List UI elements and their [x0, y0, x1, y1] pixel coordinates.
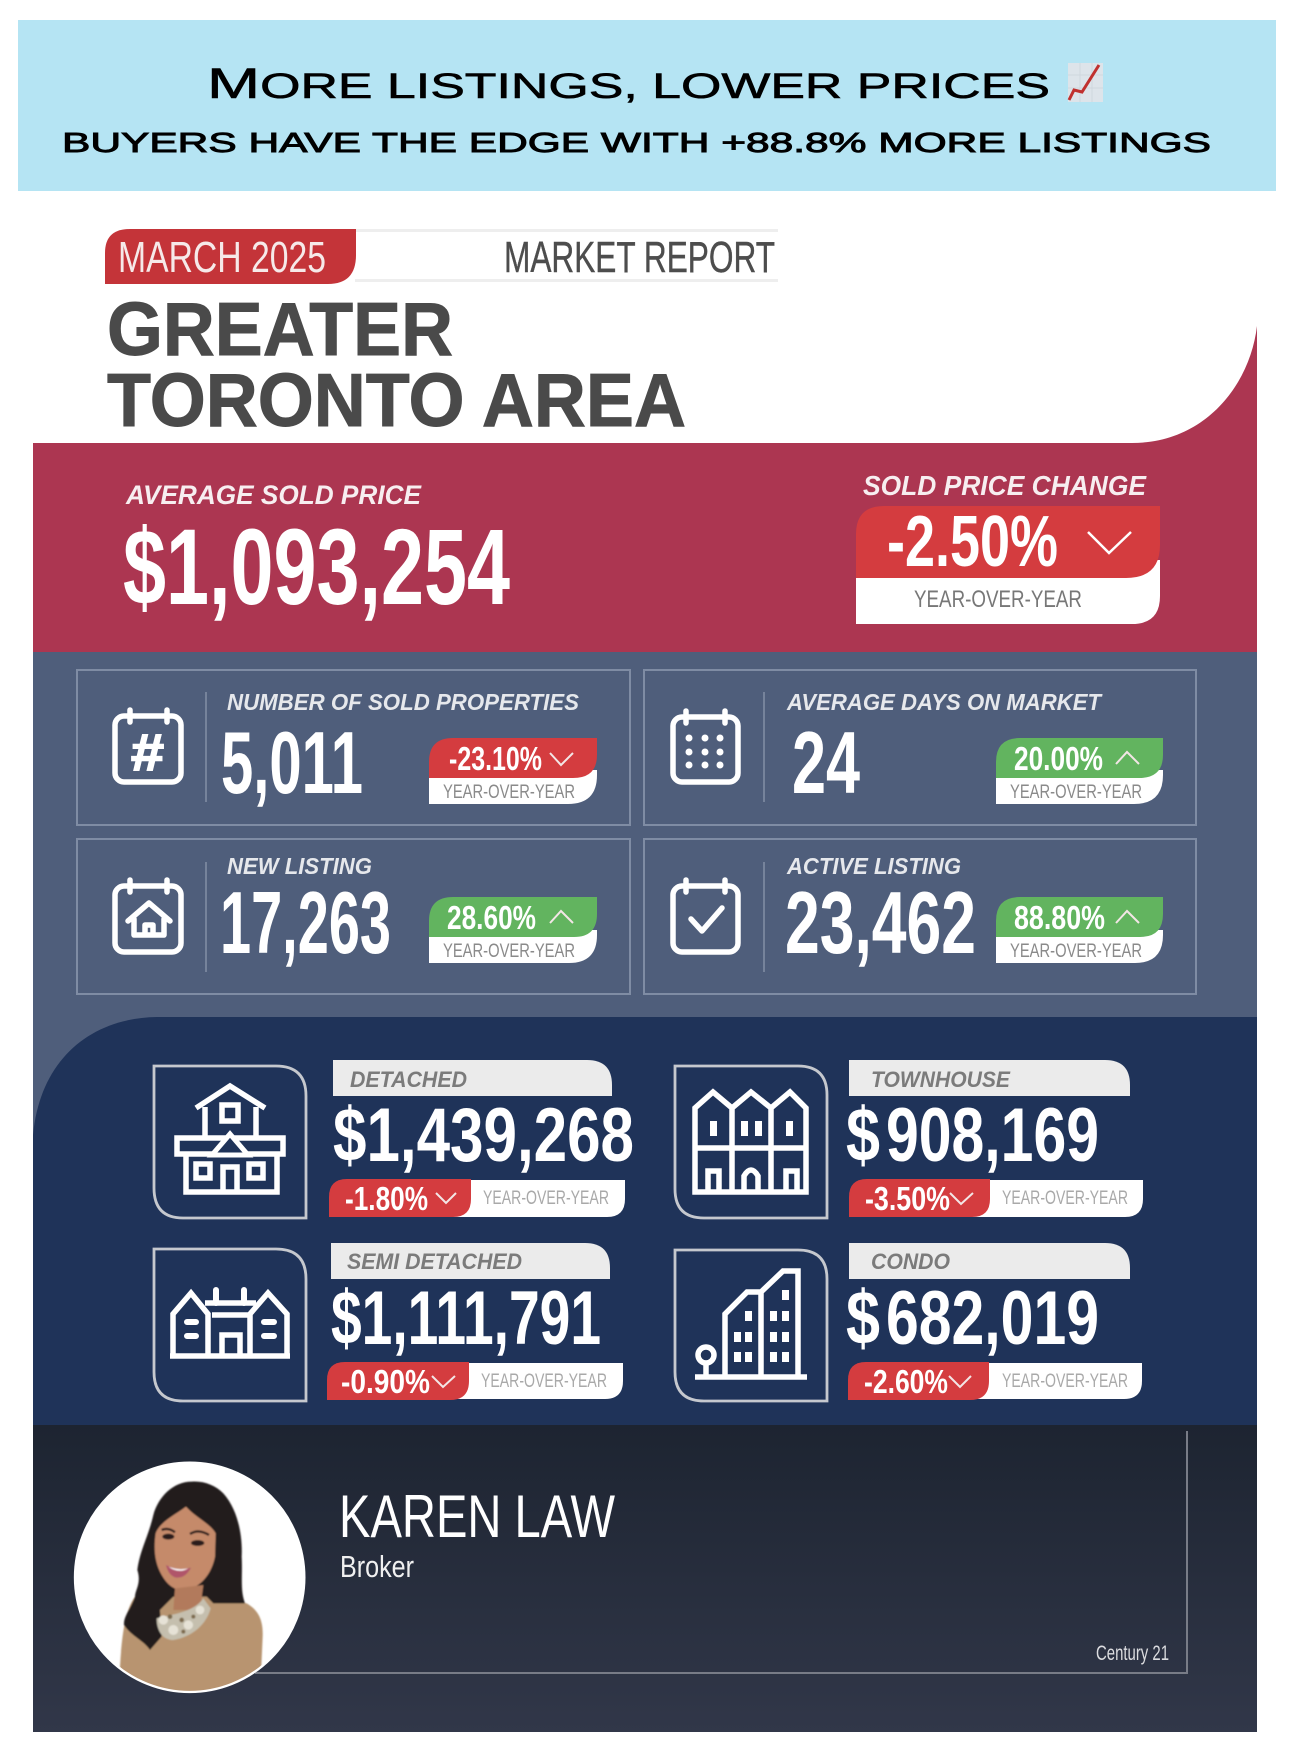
- sold price change badge: -2.50%: [887, 502, 1058, 582]
- price: $1,111,791: [331, 1276, 601, 1361]
- sold price change badge: YEAR-OVER-YEAR: [914, 586, 1082, 613]
- brokerage: Century 21: [1096, 1642, 1169, 1665]
- icon: calendar home: [115, 880, 181, 952]
- change badge: YEAR-OVER-YEAR: [1010, 941, 1142, 962]
- block: semi detached: [154, 1243, 623, 1401]
- label: [331, 1243, 610, 1279]
- banner subtitle: BUYERS HAVE THE EDGE WITH +88.8% MORE LISTINGS: [62, 127, 1211, 158]
- region title: [107, 287, 686, 442]
- region title: TORONTO AREA: [107, 358, 686, 442]
- label: [849, 1060, 1130, 1096]
- change badge: [429, 738, 597, 804]
- change badge: [327, 1362, 623, 1400]
- change badge: YEAR-OVER-YEAR: [1010, 782, 1142, 803]
- icon: townhouse: [675, 1066, 827, 1218]
- report header: MARCH 2025: [118, 233, 326, 282]
- block: detached: [154, 1060, 634, 1218]
- change badge: -2.60%: [864, 1363, 948, 1400]
- market report label: MARKET REPORT: [504, 233, 775, 282]
- change badge: -3.50%: [865, 1180, 950, 1217]
- card: new listing: 17,263: [220, 873, 391, 972]
- sold price change badge: [856, 502, 1160, 624]
- change badge: [996, 897, 1163, 963]
- change badge: 88.80%: [1014, 899, 1105, 936]
- change badge: YEAR-OVER-YEAR: [1002, 1188, 1128, 1209]
- change badge: -23.10%: [449, 740, 542, 777]
- panel: agent footer: [33, 1425, 1257, 1732]
- block: townhouse: [675, 1060, 1143, 1218]
- block: semi detached: SEMI DETACHED: [347, 1249, 522, 1274]
- card: average days on market: [644, 670, 1196, 825]
- change badge: [996, 738, 1163, 804]
- icon: calendar hash: [115, 710, 181, 782]
- price: $: [846, 1276, 880, 1361]
- price: [846, 1276, 1099, 1361]
- label: [849, 1243, 1130, 1279]
- icon: chart emoji: [1068, 63, 1103, 102]
- block: townhouse: TOWNHOUSE: [871, 1067, 1011, 1092]
- agent name: KAREN LAW: [339, 1483, 615, 1550]
- card: average days on market: AVERAGE DAYS ON MARKET: [786, 689, 1103, 715]
- change badge: -0.90%: [341, 1363, 430, 1400]
- change badge: YEAR-OVER-YEAR: [443, 941, 575, 962]
- change badge: 20.00%: [1014, 740, 1103, 777]
- change badge: [849, 1179, 1143, 1217]
- banner title: M ORE LISTINGS, LOWER PRICES: [207, 60, 1050, 108]
- change badge: 28.60%: [447, 899, 536, 936]
- card: number of sold properties: [77, 670, 630, 825]
- change badge: YEAR-OVER-YEAR: [1002, 1371, 1128, 1392]
- average sold price label: AVERAGE SOLD PRICE: [125, 480, 422, 510]
- price: 908,169: [886, 1093, 1099, 1178]
- change badge: [848, 1362, 1142, 1400]
- price: 682,019: [886, 1276, 1099, 1361]
- sold price change label: SOLD PRICE CHANGE: [863, 470, 1147, 501]
- icon: calendar hash: #: [131, 724, 164, 782]
- card: new listing: [77, 839, 630, 994]
- card: new listing: NEW LISTING: [227, 853, 372, 879]
- icon: detached house: [154, 1066, 306, 1218]
- panel: property types: [33, 1017, 1257, 1425]
- report header: [105, 229, 778, 442]
- card: number of sold properties: NUMBER OF SOLD PROPERTIES: [227, 689, 580, 715]
- card: number of sold properties: 5,011: [221, 713, 363, 812]
- block: condo: [675, 1243, 1142, 1401]
- icon: calendar check: [673, 880, 738, 952]
- region title: GREATER: [107, 287, 453, 371]
- agent photo: [74, 1462, 305, 1697]
- change badge: [329, 1179, 625, 1217]
- change badge: -1.80%: [345, 1180, 428, 1217]
- change badge: YEAR-OVER-YEAR: [443, 782, 575, 803]
- panel: market statistics: [33, 652, 1257, 1162]
- banner: [18, 20, 1276, 191]
- panel: average sold price: [33, 326, 1257, 652]
- price: [846, 1093, 1099, 1178]
- card: average days on market: 24: [792, 713, 860, 812]
- change badge: [429, 897, 597, 963]
- change badge: YEAR-OVER-YEAR: [481, 1371, 607, 1392]
- change badge: YEAR-OVER-YEAR: [483, 1188, 609, 1209]
- price: $: [846, 1093, 880, 1178]
- month tab: [105, 229, 356, 284]
- card: active listing: ACTIVE LISTING: [786, 853, 961, 879]
- card: active listing: [644, 839, 1196, 994]
- label: [333, 1060, 612, 1096]
- icon: calendar dots: [673, 711, 738, 782]
- block: detached: DETACHED: [350, 1067, 467, 1092]
- agent title: Broker: [340, 1549, 414, 1584]
- icon: semi detached house: [154, 1249, 306, 1401]
- price: $1,439,268: [333, 1093, 634, 1178]
- icon: condo building: [675, 1250, 827, 1401]
- average sold price value: $1,093,254: [123, 506, 510, 627]
- card: active listing: 23,462: [785, 873, 976, 972]
- block: condo: CONDO: [871, 1249, 950, 1274]
